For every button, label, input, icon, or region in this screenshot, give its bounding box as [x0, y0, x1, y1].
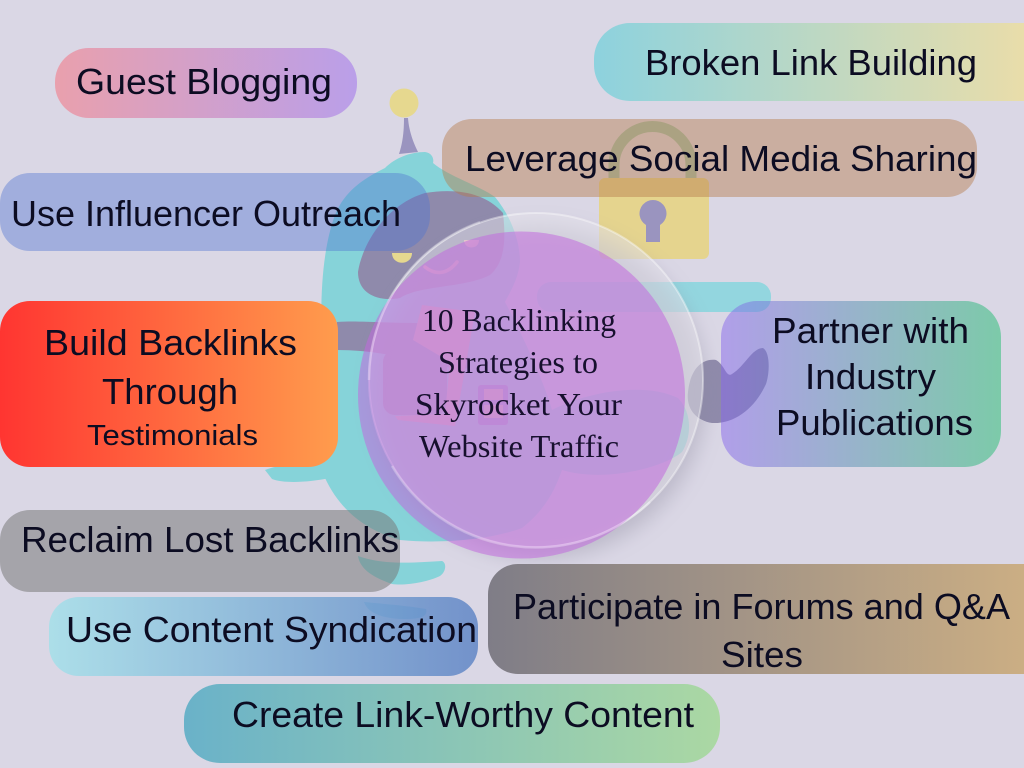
pink circle	[358, 232, 685, 558]
line 3: Testimonials	[87, 420, 258, 452]
line 3: Publications	[776, 402, 973, 443]
panel: Use Content Syndication: Use Content Syndication	[66, 609, 477, 650]
padlock body	[599, 178, 709, 259]
robot second foot	[364, 602, 426, 619]
robot arm	[337, 322, 470, 368]
illustration: robot	[265, 88, 771, 619]
line 1: Participate in Forums and Q&A	[513, 586, 1011, 627]
padlock shackle	[614, 127, 691, 180]
robot body	[310, 152, 689, 542]
panel: Leverage Social Media Sharing	[442, 119, 977, 197]
panel: Reclaim Lost Backlinks	[0, 510, 400, 592]
phone device	[478, 385, 508, 425]
panel: Use Influencer Outreach	[0, 173, 430, 251]
panel: Use Content Syndication	[49, 597, 478, 676]
title line 3: Skyrocket Your	[415, 386, 622, 422]
robot right eye	[464, 240, 479, 248]
note paper	[395, 305, 475, 426]
glass circle	[369, 213, 703, 547]
phone frame	[478, 385, 508, 425]
robot antenna	[399, 118, 418, 154]
robot left eye	[392, 253, 412, 263]
panel: Build Backlinks Through Testimonials	[0, 301, 338, 467]
panel: Partner with Industry Publications	[721, 301, 1001, 467]
robot smile	[425, 262, 457, 272]
title line 2: Strategies to	[438, 344, 598, 380]
panel: Participate in Forums and Q&A Sites	[488, 564, 1024, 675]
line 1: Build Backlinks	[44, 322, 297, 363]
glass circle shadow	[374, 226, 706, 558]
panel: Broken Link Building: Broken Link Building	[645, 42, 977, 83]
panel: Create Link-Worthy Content: Create Link-Worthy Content	[232, 694, 694, 735]
panel: Create Link-Worthy Content	[184, 684, 720, 763]
padlock keyhole	[640, 200, 667, 242]
robot chest panel	[383, 350, 447, 415]
panel: Guest Blogging	[55, 48, 357, 118]
robot left hand	[265, 464, 340, 482]
panel: Reclaim Lost Backlinks: Reclaim Lost Backlinks	[21, 519, 399, 560]
title line 4: Website Traffic	[419, 428, 619, 464]
panel: Use Influencer Outreach: Use Influencer Outreach	[11, 193, 401, 234]
robot right arm	[688, 348, 769, 423]
title line 1: 10 Backlinking	[422, 302, 616, 338]
robot visor	[358, 191, 504, 299]
glass circle highlight	[369, 222, 650, 547]
robot antenna ball	[390, 88, 418, 118]
robot foot	[358, 556, 445, 585]
line 1: Partner with	[772, 310, 969, 351]
line 2: Through	[102, 371, 238, 412]
panel: Guest Blogging: Guest Blogging	[76, 61, 332, 102]
center title	[415, 302, 622, 464]
phone screen bars	[484, 389, 503, 418]
line 2: Sites	[721, 634, 803, 675]
panel: Leverage Social Media Sharing: Leverage Social Media Sharing	[465, 138, 977, 179]
panel: Broken Link Building	[594, 23, 1024, 101]
icon: padlock	[599, 127, 709, 259]
connector bar	[537, 282, 771, 312]
line 2: Industry	[805, 356, 937, 397]
